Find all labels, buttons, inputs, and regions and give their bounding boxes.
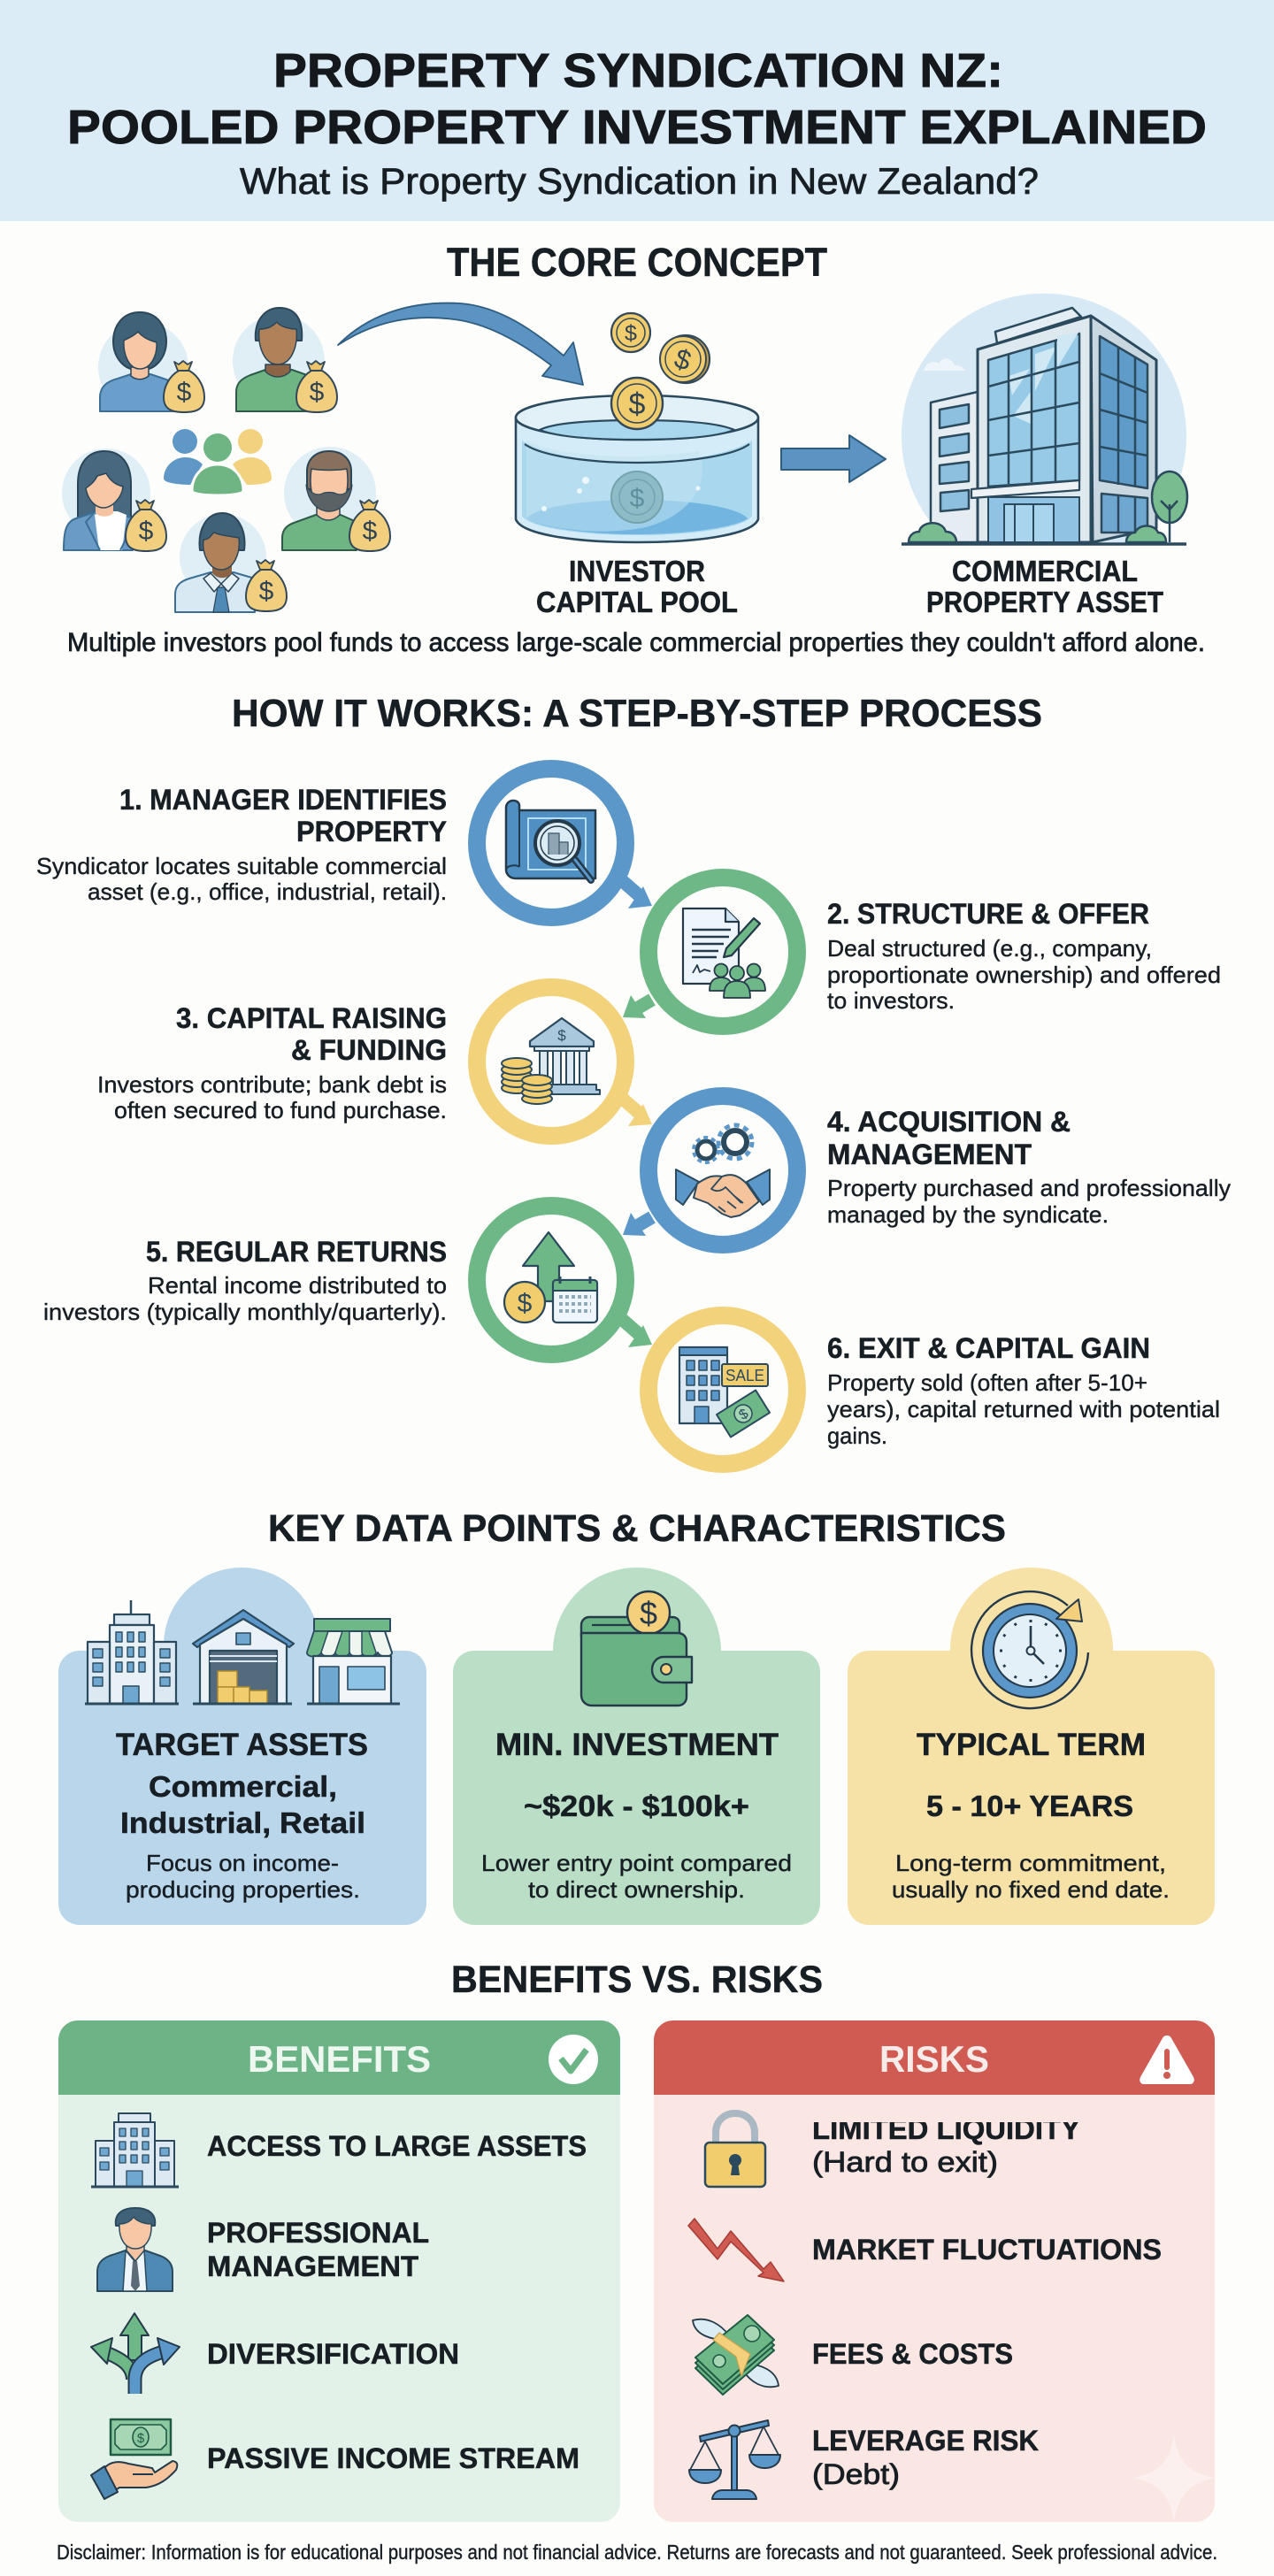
arrow: step 5 to 6: [617, 1315, 652, 1347]
icon: wallet and coin: $: [640, 1595, 657, 1631]
text: minimum investment: [481, 1728, 792, 1903]
label: investor capital pool: [536, 555, 738, 618]
text: diversification: DIVERSIFICATION: [207, 2338, 459, 2370]
icon: falling arrow: [688, 2219, 784, 2281]
icon: office, warehouse and shop: [85, 1600, 400, 1704]
icon: padlock: [705, 2113, 765, 2187]
text: step 5: 5. REGULAR RETURNS: [146, 1236, 447, 1268]
text: typical term: TYPICAL TERM: [917, 1728, 1146, 1762]
text: professional management: PROFESSIONAL: [207, 2217, 429, 2249]
icon: investor capital pool: $: [630, 484, 645, 513]
icon: cash in open hand: [91, 2419, 177, 2499]
ring: step 3: [477, 987, 625, 1136]
text: minimum investment: ~$20k - $100k+: [524, 1790, 749, 1822]
icon: cash in open hand: $: [137, 2431, 145, 2446]
step 3: [97, 987, 625, 1136]
text: step 1: [36, 784, 447, 905]
text: access to large assets: ACCESS TO LARGE ASSETS: [207, 2130, 587, 2162]
text: leverage risk: (Debt): [812, 2458, 900, 2490]
arrow: pool to asset: [781, 435, 886, 482]
text: step 4: Property purchased and professionally: [827, 1175, 1231, 1201]
risks header: RISKS: [879, 2038, 989, 2080]
arrow: investors to pool: [338, 303, 583, 385]
risks header: [654, 2020, 1215, 2095]
icon: investor group: [164, 429, 272, 495]
money bag: $: [177, 378, 192, 407]
ring: step 1: [477, 769, 625, 917]
ring: step 6: [649, 1315, 797, 1464]
step 2: [649, 878, 1221, 1026]
ring: step 4: [649, 1096, 797, 1245]
icon: building for sale with cash: [679, 1347, 770, 1437]
text: minimum investment: to direct ownership.: [528, 1876, 745, 1903]
investor 1: [98, 312, 204, 412]
money bag: $: [259, 577, 274, 606]
panel: benefits: [58, 2020, 620, 2522]
text: step 5: investors (typically monthly/quarterly).: [43, 1299, 447, 1325]
text: step 5: Rental income distributed to: [148, 1272, 447, 1299]
text: leverage risk: LEVERAGE RISK: [812, 2425, 1039, 2457]
text: step 4: [827, 1106, 1231, 1228]
coin entering pool: [611, 378, 663, 429]
investor 4: [282, 447, 390, 551]
text: target assets: producing properties.: [126, 1876, 360, 1903]
icon: blueprint and magnifier: [506, 801, 595, 880]
header band: [0, 0, 1274, 221]
text: step 4: MANAGEMENT: [827, 1138, 1032, 1170]
text: step 3: [97, 1002, 447, 1123]
icon: diverging arrows: [91, 2313, 180, 2394]
text: target assets: Commercial,: [149, 1770, 337, 1803]
icon: returns arrow, coin and calendar: $: [518, 1289, 533, 1318]
text: step 5: [43, 1236, 447, 1325]
text: step 3: 3. CAPITAL RAISING: [176, 1002, 447, 1034]
arrow: step 1 to 2: [617, 876, 652, 908]
text: step 6: [827, 1332, 1220, 1449]
icon: contract and investors: [683, 908, 765, 998]
icon: building: [91, 2113, 179, 2187]
text: market fluctuations: MARKET FLUCTUATIONS: [812, 2234, 1162, 2266]
text: step 4: managed by the syndicate.: [827, 1201, 1109, 1228]
text: step 3: & FUNDING: [291, 1034, 447, 1066]
title: POOLED PROPERTY INVESTMENT EXPLAINED: [67, 101, 1207, 154]
text: professional management: [207, 2217, 429, 2282]
investor 3: [62, 448, 166, 551]
process arrows: [617, 876, 652, 1347]
icon: gears and handshake: [676, 1125, 770, 1217]
step 5: [43, 1206, 625, 1354]
icon: building for sale with cash: SALE: [725, 1367, 764, 1384]
text: step 2: to investors.: [827, 987, 955, 1014]
card: minimum investment: [453, 1568, 820, 1925]
heading: benefits vs risks: BENEFITS VS. RISKS: [451, 1959, 823, 2001]
subtitle: What is Property Syndication in New Zealand?: [240, 160, 1039, 202]
money bag: $: [363, 517, 378, 546]
text: step 2: [827, 898, 1221, 1014]
text: step 2: Deal structured (e.g., company,: [827, 935, 1152, 962]
text: step 6: Property sold (often after 5-10+: [827, 1369, 1147, 1396]
text: typical term: Long-term commitment,: [895, 1850, 1166, 1876]
text: typical term: 5 - 10+ YEARS: [926, 1790, 1133, 1822]
label: investor capital pool: INVESTOR: [569, 555, 705, 587]
icon: returns arrow, coin and calendar: [504, 1232, 597, 1322]
investor 2: [233, 308, 337, 412]
text: target assets: TARGET ASSETS: [116, 1728, 368, 1762]
arrow: step 3 to 4: [617, 1093, 652, 1126]
arrow: step 2 to 3: [623, 995, 652, 1018]
text: step 3: often secured to fund purchase.: [114, 1097, 447, 1123]
label: investor capital pool: CAPITAL POOL: [536, 586, 738, 618]
icon: clock: [971, 1591, 1088, 1708]
title: PROPERTY SYNDICATION NZ:: [273, 44, 1003, 97]
icon: falling coins: $: [625, 321, 637, 346]
icon: balance scales: [689, 2420, 780, 2499]
label: commercial property asset: [926, 555, 1163, 618]
coin entering pool: $: [629, 387, 646, 421]
text: fees and costs: FEES & COSTS: [812, 2338, 1013, 2370]
benefits header: [58, 2020, 620, 2095]
icon: wallet and coin: [581, 1591, 692, 1706]
icon: commercial building: [902, 294, 1187, 544]
text: target assets: Industrial, Retail: [120, 1806, 365, 1839]
arrow: step 4 to 5: [623, 1213, 652, 1236]
ring: step 5: [477, 1206, 625, 1354]
money bag: $: [310, 378, 325, 407]
panel: investors: [62, 308, 390, 612]
icon: bank and coin stacks: [502, 1018, 600, 1104]
text: step 1: PROPERTY: [296, 816, 447, 847]
text: typical term: usually no fixed end date.: [892, 1876, 1170, 1903]
title: [67, 44, 1207, 154]
text: typical term: [892, 1728, 1170, 1903]
text: limited liquidity: (Hard to exit): [812, 2146, 998, 2178]
text: step 1: 1. MANAGER IDENTIFIES: [119, 784, 447, 816]
text: limited liquidity: LIMITED LIQUIDITY: [812, 2113, 1080, 2145]
text: step 6: years), capital returned with potential: [827, 1396, 1220, 1422]
step 1: [36, 769, 625, 917]
text: step 4: 4. ACQUISITION &: [827, 1106, 1071, 1138]
investor 5: [175, 513, 287, 612]
money bag: $: [139, 517, 154, 546]
card: typical term: [848, 1568, 1215, 1925]
icon: bank and coin stacks: $: [557, 1027, 566, 1044]
icon: building for sale with cash: $: [737, 1407, 751, 1423]
icon: falling coins: [611, 313, 710, 383]
text: target assets: Focus on income-: [146, 1850, 339, 1876]
text: step 1: asset (e.g., office, industrial, retail).: [88, 878, 447, 905]
card: target assets: [58, 1568, 426, 1925]
text: step 2: proportionate ownership) and offered: [827, 962, 1221, 988]
icon: cash with wings: [693, 2315, 779, 2395]
icon: falling coins: $: [671, 342, 695, 377]
heading: key data points: KEY DATA POINTS & CHARACTERISTICS: [268, 1507, 1006, 1550]
ring: step 2: [649, 878, 797, 1026]
icon: investor capital pool: [516, 378, 758, 542]
step 6: [649, 1315, 1220, 1464]
benefits header: BENEFITS: [248, 2038, 431, 2080]
label: commercial property asset: COMMERCIAL: [952, 555, 1138, 587]
text: step 2: 2. STRUCTURE & OFFER: [827, 898, 1149, 930]
text: step 3: Investors contribute; bank debt is: [97, 1071, 447, 1098]
decorative sparkle: [1133, 2434, 1215, 2521]
caption: core concept: Multiple investors pool funds to access large-scale commercial properties they couldn't afford alone.: [67, 628, 1205, 657]
text: passive income stream: PASSIVE INCOME STREAM: [207, 2442, 579, 2474]
heading: how it works: HOW IT WORKS: A STEP-BY-STEP PROCESS: [232, 692, 1042, 735]
text: step 6: 6. EXIT & CAPITAL GAIN: [827, 1332, 1150, 1364]
text: target assets: [116, 1728, 368, 1903]
label: commercial property asset: PROPERTY ASSET: [926, 586, 1163, 618]
text: limited liquidity: [814, 2122, 1078, 2178]
text: step 6: gains.: [827, 1422, 887, 1449]
text: step 1: Syndicator locates suitable commercial: [36, 853, 447, 879]
text: minimum investment: MIN. INVESTMENT: [495, 1728, 779, 1762]
text: leverage risk: [812, 2425, 1039, 2490]
step 4: [649, 1096, 1231, 1245]
icon: professional manager: [97, 2208, 173, 2291]
panel: risks: [654, 2020, 1215, 2522]
heading: the core concept: THE CORE CONCEPT: [447, 240, 827, 285]
text: professional management: MANAGEMENT: [207, 2250, 418, 2282]
text: minimum investment: Lower entry point compared: [481, 1850, 792, 1876]
